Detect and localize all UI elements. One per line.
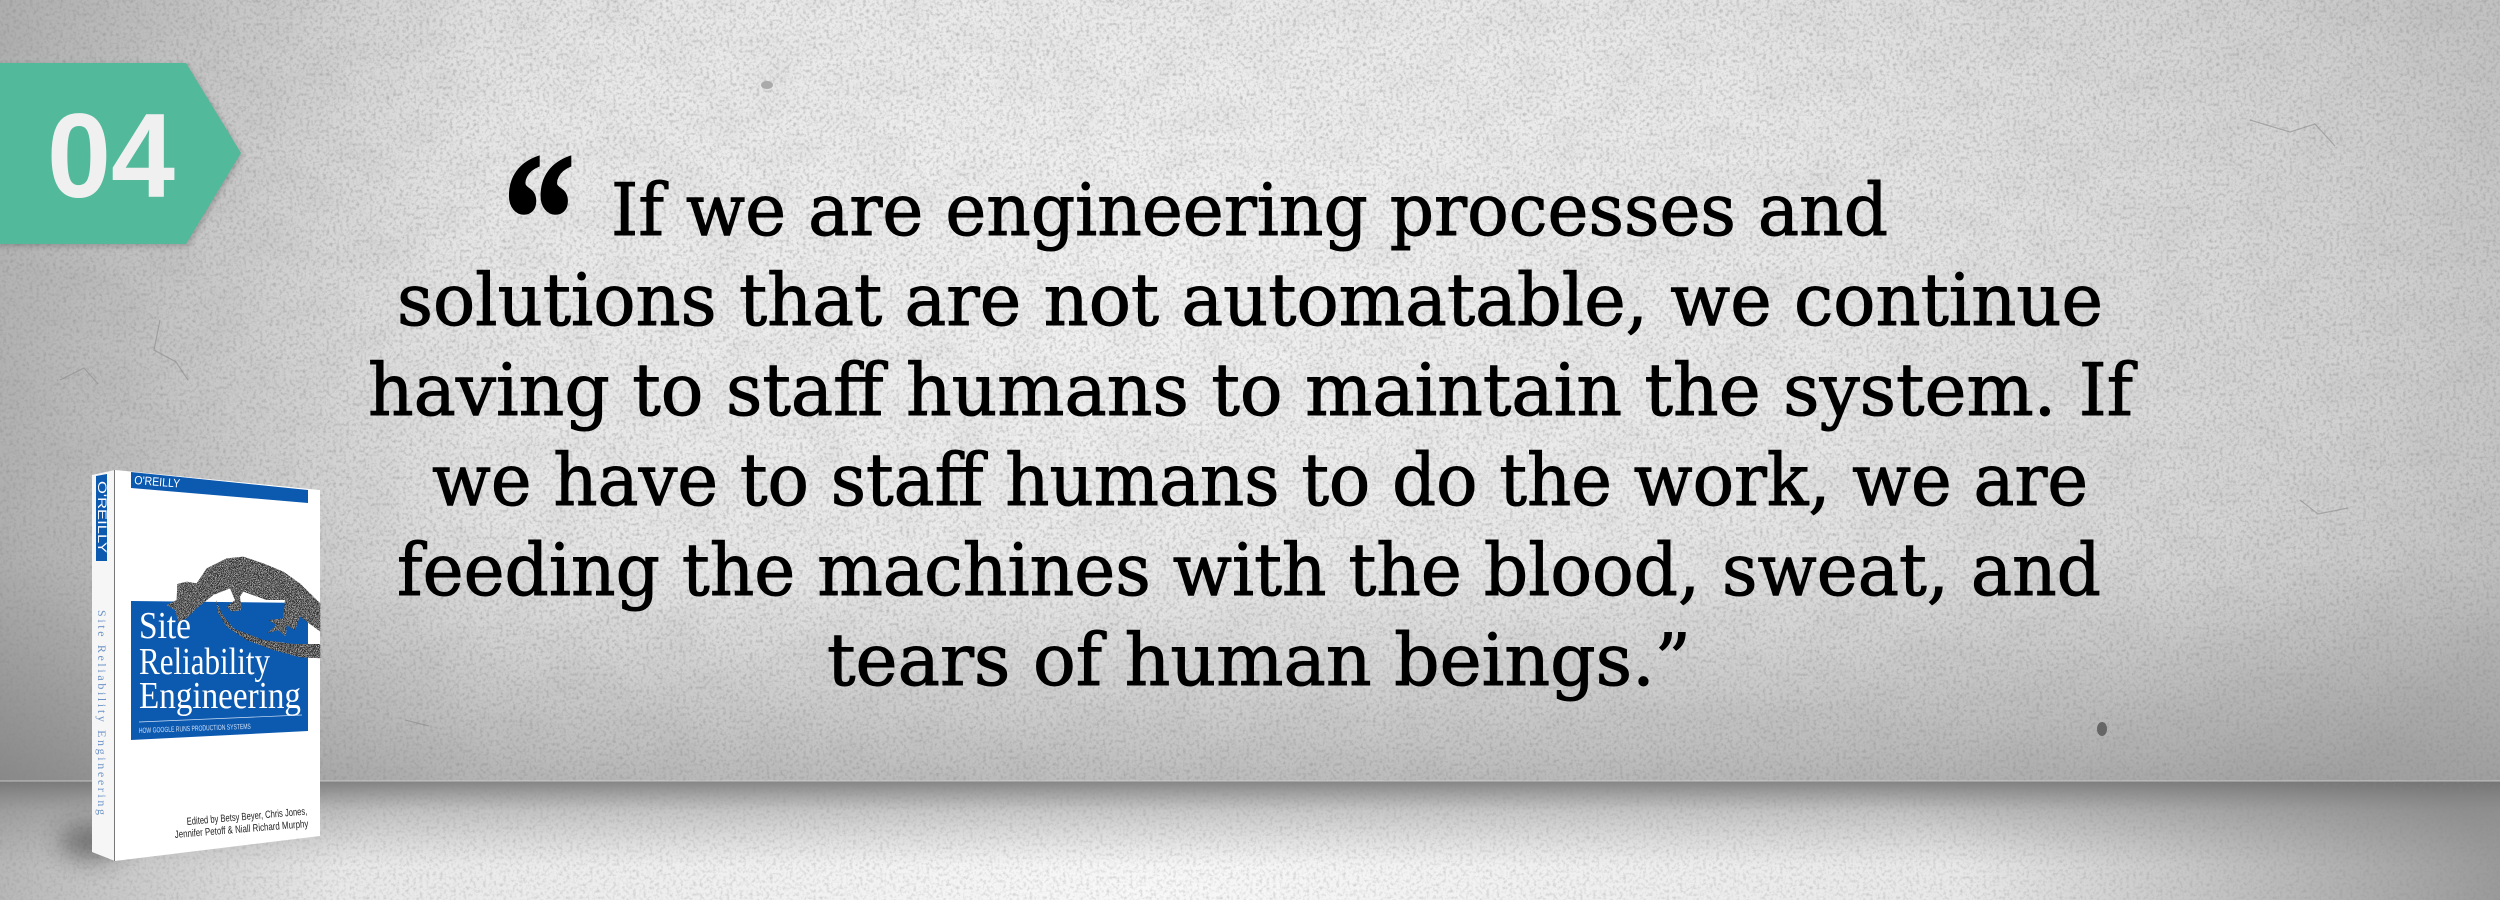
- book spine: O'REILLY: [95, 481, 109, 553]
- book cover: O'REILLY: [134, 473, 181, 491]
- illustration: lizard: [167, 557, 320, 658]
- quote text: having to staff humans to maintain the system. If: [368, 348, 2137, 432]
- quote text: tears of human beings.”: [827, 618, 1691, 702]
- cover title: [139, 605, 301, 717]
- quote text: feeding the machines with the blood, sweat, and: [397, 528, 2101, 612]
- cover title: Site: [139, 605, 191, 647]
- cover title: Reliability: [139, 641, 270, 683]
- cover top band: [131, 472, 308, 503]
- book spine: [92, 470, 116, 861]
- book cover: [115, 470, 320, 861]
- background: concrete floor: [0, 780, 2500, 900]
- quote text: If we are engineering processes and: [611, 168, 1888, 252]
- cover title block: [131, 601, 308, 740]
- badge number: 04: [47, 89, 175, 223]
- number badge: [0, 63, 243, 246]
- book spine: Site Reliability Engineering: [95, 610, 109, 815]
- book: Site Reliability Engineering: [60, 470, 320, 861]
- cover editors: Jennifer Petoff & Niall Richard Murphy: [174, 818, 309, 841]
- cover subtitle: HOW GOOGLE RUNS PRODUCTION SYSTEMS: [139, 722, 251, 735]
- quote text: we have to staff humans to do the work, we are: [432, 438, 2088, 522]
- book shadow: [60, 824, 124, 860]
- opening quotation mark: “: [503, 116, 575, 322]
- cover editors: Edited by Betsy Beyer, Chris Jones,: [186, 805, 308, 828]
- cover editors: [174, 805, 309, 841]
- quote text: [368, 168, 2137, 702]
- quote text: solutions that are not automatable, we continue: [397, 258, 2103, 342]
- cover title: Engineering: [139, 675, 301, 717]
